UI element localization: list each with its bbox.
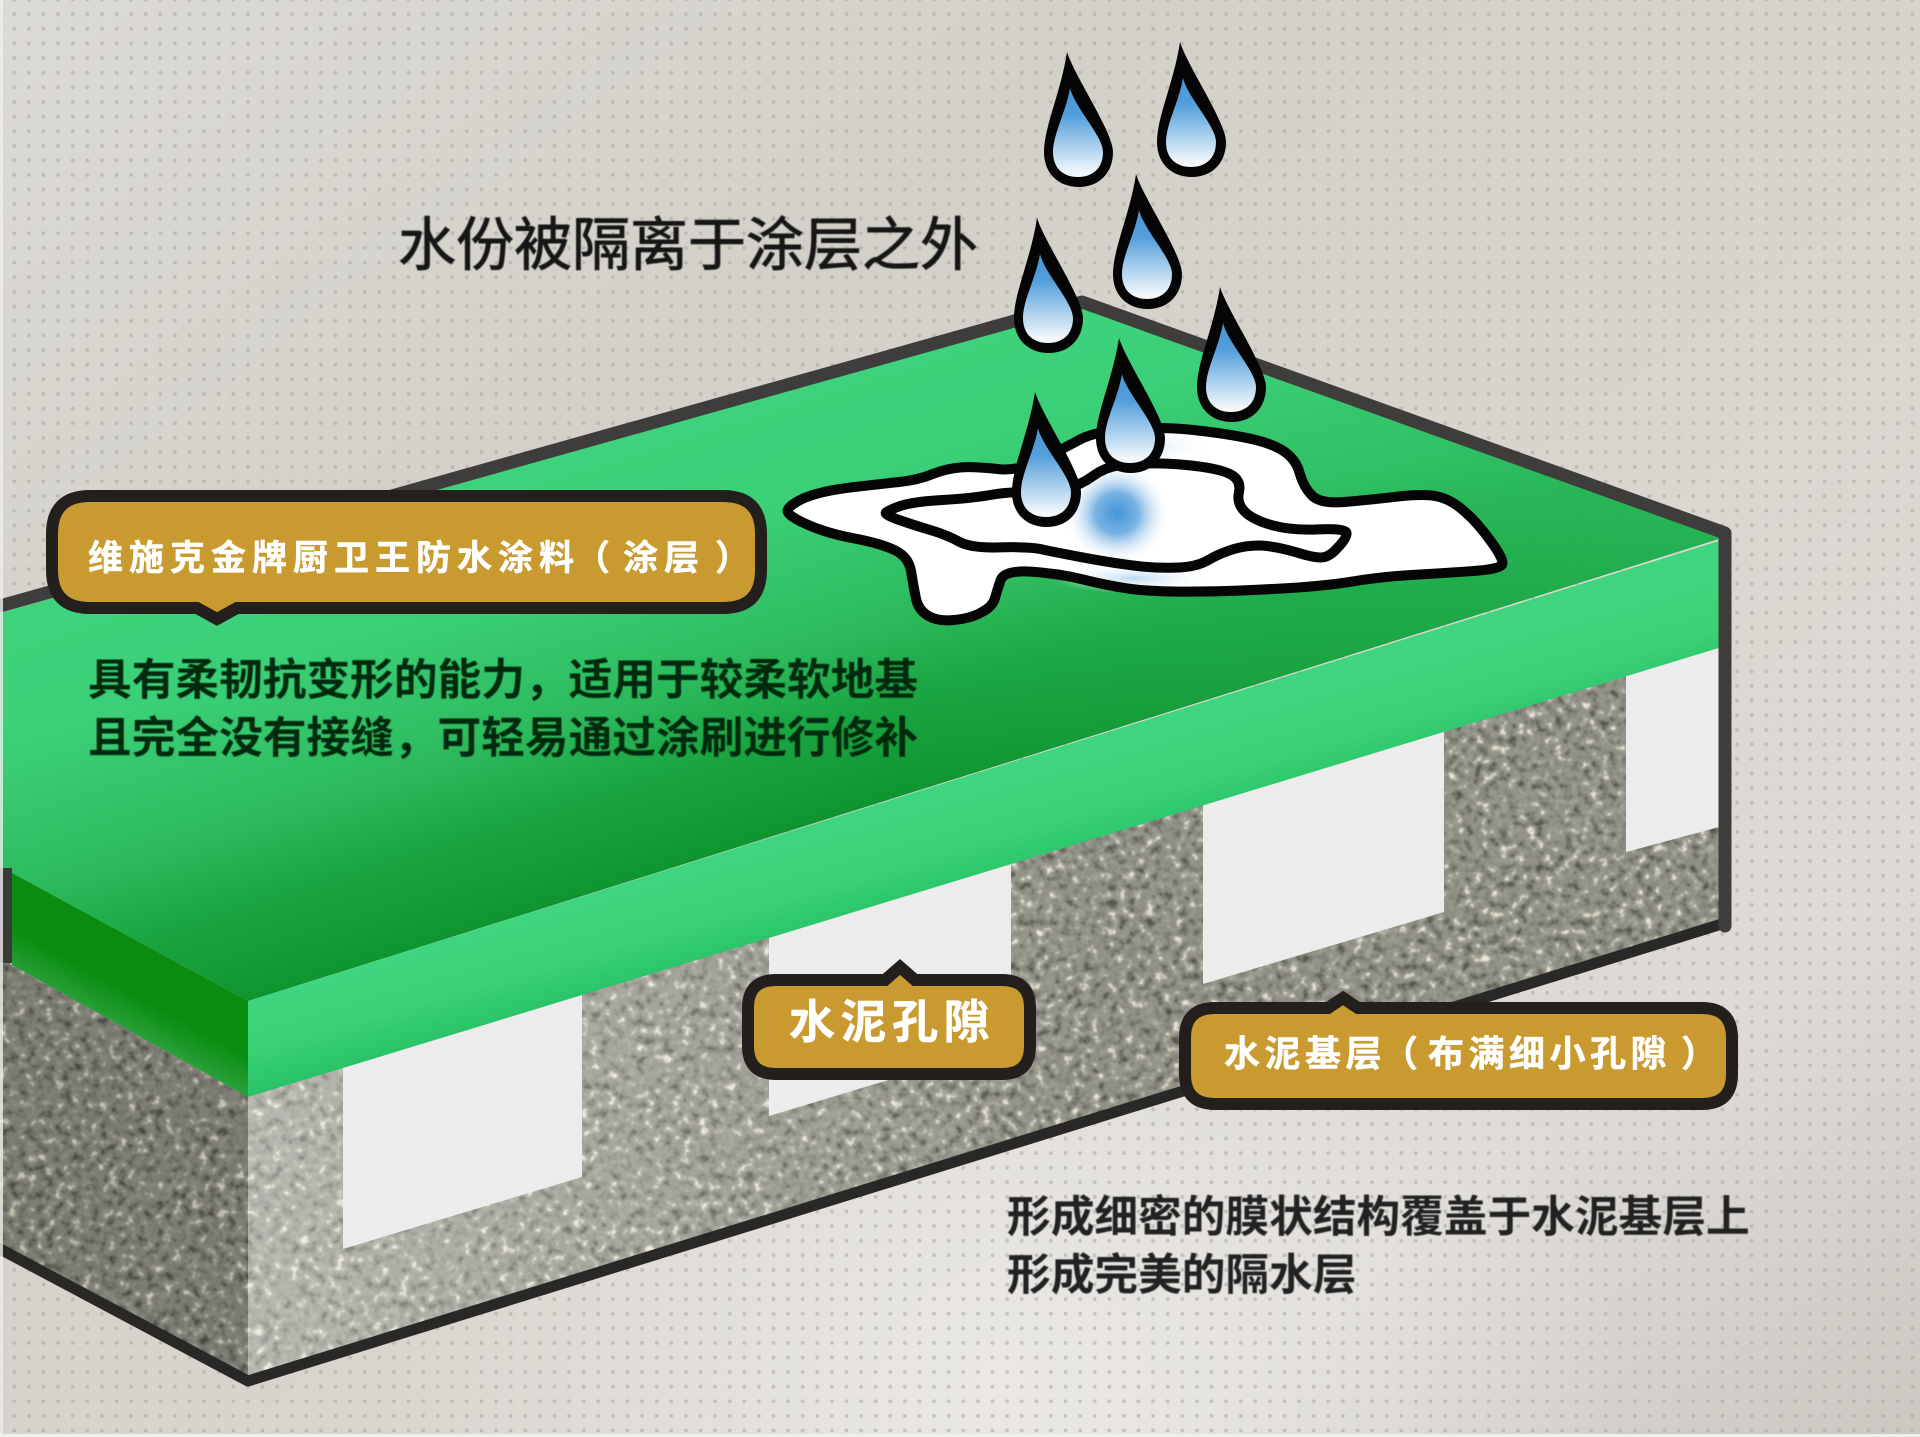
text block: coating properties: 且完全没有接缝，可轻易通过涂刷进行修补 [88, 714, 918, 763]
icon: water drop 4 [1014, 218, 1083, 353]
cement pore 4 [1626, 640, 1719, 852]
callout: cement base layer: 水泥基层 [1224, 1033, 1386, 1074]
text block: coating properties: 具有柔韧抗变形的能力，适用于较柔软地基 [88, 656, 918, 705]
water puddle [788, 428, 1502, 620]
text block: membrane caption: 形成完美的隔水层 [1007, 1251, 1357, 1300]
title: water kept out: 水份被隔离于涂层之外 [398, 213, 978, 278]
text block: membrane caption [1007, 1193, 1750, 1300]
left edge outline [0, 868, 12, 963]
icon: water drop 2 [1157, 42, 1226, 177]
icon: water drop 3 [1113, 174, 1182, 309]
callout: coating label: 维施克金牌厨卫王防水涂料 [88, 539, 580, 578]
puddle blue tint upper [1091, 430, 1215, 463]
coating top surface [0, 308, 1722, 1001]
coating left side [12, 873, 248, 1097]
green waterproof coating [0, 302, 1725, 1097]
coating right lightening [900, 308, 1722, 795]
concrete texture [0, 640, 1725, 1390]
icon: water drop 5 [1197, 287, 1266, 422]
icon: water drop 1 [1044, 52, 1113, 187]
cement pore 3 [1203, 725, 1444, 984]
callout: cement pores: 水泥孔隙 [789, 996, 995, 1048]
callout: cement base layer: （ [1382, 1033, 1423, 1074]
puddle blue tint lower [1052, 563, 1215, 593]
callout: coating label: 涂层 [623, 539, 705, 578]
coating front strip [248, 540, 1722, 1097]
text block: coating properties [88, 656, 918, 763]
callout: cement base layer: ） [1681, 1033, 1722, 1074]
callout: coating label: ） [715, 539, 756, 578]
callout: coating label [52, 496, 761, 619]
icon: water drop 7 [1012, 392, 1081, 527]
cement pore 2 [769, 860, 1011, 1116]
callout: coating label: （ [575, 539, 616, 578]
callout: cement pores [748, 967, 1030, 1074]
callout: cement base layer: 布满细小孔隙 [1428, 1033, 1671, 1074]
cement pore 1 [343, 980, 582, 1249]
icon: water drop 6 [1096, 338, 1165, 473]
text block: membrane caption: 形成细密的膜状结构覆盖于水泥基层上 [1007, 1193, 1750, 1242]
callout: cement base layer [1185, 998, 1732, 1104]
puddle white fill [788, 428, 1502, 620]
block bottom outline [0, 923, 1725, 1381]
puddle blue spot [1063, 462, 1171, 565]
puddle outer outline [788, 428, 1502, 620]
puddle inner ripple [886, 463, 1347, 568]
concrete base block [0, 640, 1725, 1390]
back and right edge outline [0, 302, 1725, 926]
